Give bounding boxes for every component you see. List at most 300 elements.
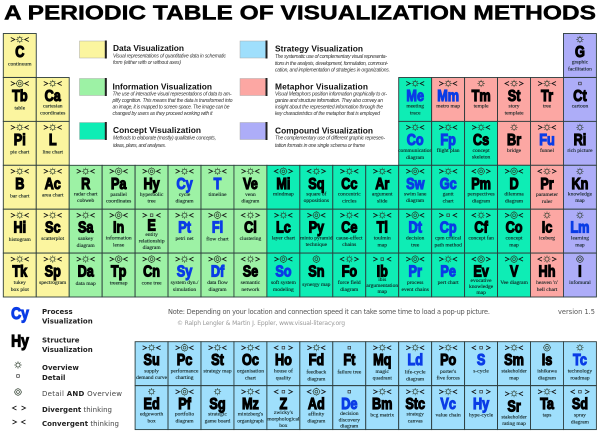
cell: Lm learning map: learning: [571, 236, 589, 242]
cell: Ad affinity diagram: Ad: [308, 396, 325, 414]
cell: Ad affinity diagram: affinity: [308, 411, 325, 418]
cell: Pr parameter ruler: parameter: [536, 192, 558, 198]
cell: De decision discovery diagram: diagram: [340, 424, 359, 430]
cell: Ft failure tree: failure tree: [337, 369, 362, 376]
cell: Fp flight plan: flight plan: [437, 147, 460, 154]
legend: compound visualization: [240, 122, 385, 149]
cell: Se semantic network: Se: [243, 263, 258, 281]
cell: Kn knowledge map: map: [575, 198, 585, 204]
cell: G graphic facilitation: G: [575, 44, 585, 61]
cell: Tr tree: [530, 78, 563, 121]
version: version 1.5: [558, 308, 595, 316]
cell: Ib ibis argumentation map: [366, 253, 399, 297]
cell: Ic iceberg: Ic: [542, 220, 552, 237]
cell: Sn synergy map: [300, 253, 333, 297]
cell: Fd feedback diagram: Fd: [309, 352, 324, 370]
cell: Tr tree: tree: [543, 104, 552, 110]
cell: Cf concept fan: Cf: [474, 220, 488, 237]
cell: Ca cartesian coordinates: Ca: [45, 88, 61, 105]
cell: Ev evocative knowledge map: [465, 253, 498, 297]
cell: St strategy map: [201, 342, 234, 386]
cell: Py minto pyramid technique: technique: [306, 242, 328, 248]
cell: Dt decision tree: tree: [411, 243, 420, 249]
cell: Z zwicky's morphological box: box: [279, 423, 288, 429]
cell: Ed edgeworth box: Ed: [143, 396, 160, 414]
cell: Sm stakeholder map: [498, 342, 530, 386]
cell: Da data map: Da: [78, 263, 94, 281]
cell: Ca cartesian coordinates: coordinates: [40, 110, 65, 116]
cell: Sy system dyn./simulation: system dyn./: [171, 280, 199, 286]
cell: Ac area chart: Ac: [45, 176, 61, 193]
cell: Fu funnel: Fu: [539, 132, 555, 149]
cell: Cn cone tree: cone tree: [142, 281, 162, 287]
cell: Kn knowledge map: knowledge: [568, 191, 593, 197]
cell: In information lense: information: [106, 235, 132, 242]
cell: Hy hyperbolic tree: Hy: [143, 176, 160, 193]
cell: Mz mintzberg's organigraph: Mz: [242, 396, 259, 414]
cell: Sy system dyn./simulation: simulation: [173, 287, 196, 293]
cell: Sq square of oppositions: square of: [306, 190, 327, 197]
cell: D dilemma diagram: [498, 165, 530, 209]
cell: Cc concentric circles: concentric: [338, 191, 361, 197]
key: process visualization: Process: [42, 308, 73, 316]
cell: Me meeting trace: [399, 78, 432, 121]
cell: So soft system modeling: So: [275, 263, 292, 281]
cell: Sr stakeholder rating map: stakeholder: [501, 415, 527, 421]
cell: Ld life-cycle diagram: life-cycle: [405, 369, 426, 376]
cell: Ri rich picture: [563, 121, 596, 165]
cell: Tr tree: Tr: [541, 88, 553, 105]
cell: T timeline: T: [214, 176, 222, 193]
key: detail: Detail: [42, 374, 65, 382]
cell: Po porter's five forces: [432, 342, 465, 386]
cell: Z zwicky's morphological box: Z: [280, 396, 288, 414]
key: overview: [14, 361, 79, 372]
cell: Sa sankey diagram: sankey: [78, 236, 94, 242]
legend: concept visualization: ideas, plans, and analyses.: [113, 143, 166, 149]
cell: Cf concept fan: [465, 209, 498, 253]
cell: Lm learning map: Lm: [570, 220, 589, 237]
cell: Mq magic quadrant: quadrant: [373, 376, 392, 382]
cell: L line chart: line chart: [42, 149, 64, 155]
cell: Ar argument slide: slide: [377, 198, 388, 204]
cell: Pt petri net: Pt: [178, 220, 191, 237]
cell: S s-cycle: [465, 342, 498, 386]
legend: metaphor visualization: key characteristics of the metaphor that is employed: [275, 111, 380, 117]
cell: De decision discovery diagram: [333, 386, 366, 430]
cell: Sw swim lane diagram: swim lane: [404, 191, 427, 197]
cell: Cp cpm critical path method: Cp: [440, 220, 457, 237]
cell: Sp spectrogram: spectrogram: [39, 280, 67, 286]
cell: Ib ibis argumentation map: ibis: [378, 277, 386, 283]
cell: Pm perspectives diagram: diagram: [472, 198, 491, 204]
cell: Tl toulmin map: [366, 209, 399, 253]
cell: Oc organisation chart: [234, 342, 267, 386]
cell: Tl toulmin map: Tl: [377, 220, 388, 237]
cell: Ev evocative knowledge map: knowledge: [469, 284, 494, 290]
cell: Fu funnel: [530, 121, 563, 165]
cell: Ve venn diagram: [234, 165, 267, 209]
cell: Z zwicky's morphological box: morphological: [267, 417, 300, 423]
cell: V Vee diagram: Vee diagram: [500, 280, 529, 286]
cell: Sd spray diagram: spray: [574, 413, 586, 419]
cell: E entity relationship diagram: E: [147, 218, 156, 235]
cell: Br bridge: [498, 121, 530, 165]
cell: B bar chart: [3, 165, 36, 209]
cell: Cp cpm critical path method: [432, 209, 465, 253]
cell: Fo force field diagram: [333, 253, 366, 297]
legend: strategy visualization: [240, 40, 390, 74]
cell: Sm stakeholder map: Sm: [504, 352, 524, 370]
cell: Sc scatterplot: [36, 209, 69, 253]
cell: Pc performance charting: Pc: [177, 352, 192, 370]
cell: Sc scatterplot: scatterplot: [41, 236, 65, 242]
cell: Mz mintzberg's organigraph: organigraph: [237, 419, 264, 425]
key: divergent thinking: Divergent thinking: [42, 406, 112, 414]
periodic table main grid: [3, 34, 596, 297]
cell: Sw swim lane diagram: Sw: [406, 176, 425, 193]
cell: Ce cause-effect chains: Ce: [341, 220, 358, 237]
legend: information visualization: The use of interactive visual representations of data to am-: [112, 92, 232, 98]
cell: Is ishikawa diagram: ishikawa: [537, 369, 557, 375]
cell: Bm bcg matrix: [366, 386, 399, 430]
cell: Pi pie chart: [3, 121, 36, 165]
legend: data visualization: [80, 40, 226, 66]
cell: Py minto pyramid technique: Py: [309, 220, 324, 237]
cell: Pf portfolio diagram: diagram: [176, 419, 194, 425]
key: process visualization: Cy: [11, 305, 29, 323]
legend: strategy visualization: The systematic use of complementary visual representa-: [275, 54, 387, 60]
key: detail and overview: Detail AND Overview: [42, 390, 122, 398]
cell: Sd spray diagram: Sd: [572, 396, 588, 414]
cell: Co communication diagram: communication: [398, 148, 433, 154]
legend: information visualization: changed by users as they proceed working with it: [112, 111, 213, 117]
cell: Co communication diagram: Co: [407, 132, 424, 149]
cell: Tc technology roadmap: Tc: [573, 352, 587, 370]
cell: Kn knowledge map: [563, 165, 596, 209]
key: process visualization: [11, 305, 93, 326]
cell: Ft failure tree: Ft: [343, 352, 356, 370]
key: structure visualization: Structure: [42, 336, 80, 344]
cell: Gc gantt chart: [432, 165, 465, 209]
strategy table: [135, 342, 596, 430]
cell: De decision discovery diagram: De: [341, 396, 358, 414]
legend: concept visualization: Methods to elaborate (mostly) qualitative concepts,: [113, 136, 216, 142]
cell: Pe pert chart: Pe: [440, 263, 456, 281]
cell: St strategy map: strategy map: [203, 369, 232, 375]
cell: Se semantic network: network: [241, 287, 260, 293]
cell: Cc concentric circles: [333, 165, 366, 209]
cell: Mz mintzberg's organigraph: [234, 386, 267, 430]
cell: Su supply demand curve: Su: [143, 352, 160, 370]
cell: Df data flow diagram: data flow: [207, 279, 228, 286]
key: detail: [17, 374, 65, 382]
cell: Sr stakeholder rating map: [498, 386, 530, 430]
cell: Sa sankey diagram: diagram: [77, 243, 95, 249]
cell: Ta taps: Ta: [540, 396, 554, 414]
cell: Cn cone tree: [135, 253, 168, 297]
cell: Cl clustering: clustering: [240, 236, 262, 242]
legend: compound visualization: The complementary use of different graphic represen-: [275, 136, 385, 142]
cell: Sy system dyn./simulation: Sy: [177, 263, 192, 281]
legend: information visualization: plify cognition. This means that the data is transformed into: [112, 98, 233, 104]
cell: Pa parallel coordinates: [102, 165, 135, 209]
cell: Stc strategy canvas: [399, 386, 432, 430]
cell: Pr process event chains: process: [407, 280, 423, 286]
cell: Cs concept skeleton: Cs: [473, 132, 489, 149]
cell: Kn knowledge map: Kn: [571, 176, 588, 193]
cell: Ce cause-effect chains: [333, 209, 366, 253]
cell: Hy hype-cycle: [465, 386, 498, 430]
cell: Ca cartesian coordinates: [36, 78, 69, 121]
cell: Pi pie chart: Pi: [14, 132, 26, 149]
cell: Hi histogram: histogram: [9, 237, 32, 243]
cell: Pa parallel coordinates: coordinates: [106, 198, 131, 204]
cell: Mm metro map: metro map: [436, 104, 460, 110]
cell: D dilemma diagram: diagram: [505, 198, 524, 204]
cell: Cs concept skeleton: [465, 121, 498, 165]
cell: Ta taps: taps: [543, 413, 551, 419]
cell: Hy hyperbolic tree: [135, 165, 168, 209]
cell: Mi mindmap: [267, 165, 300, 209]
cell: Ld life-cycle diagram: Ld: [407, 352, 423, 370]
cell: Sd spray diagram: [563, 386, 596, 430]
cell: Cl clustering: Cl: [244, 220, 257, 237]
legend: strategy visualization: Strategy Visualization: [275, 44, 363, 54]
legend: metaphor visualization: Metaphor Visualization: [275, 82, 368, 92]
cell: C continuum: continuum: [8, 62, 32, 68]
cell: Sq square of oppositions: Sq: [308, 176, 324, 193]
cell: Po porter's five forces: five forces: [436, 375, 460, 382]
cell: Co concept map: concept: [505, 236, 523, 242]
cell: Ad affinity diagram: diagram: [307, 419, 326, 425]
cell: Ld life-cycle diagram: [399, 342, 432, 386]
cell: Sn synergy map: Sn: [308, 263, 324, 281]
key: structure visualization: [11, 332, 93, 354]
cell: G graphic facilitation: graphic: [572, 60, 589, 66]
cell: Ve venn diagram: venn: [245, 192, 256, 198]
cell: Ib ibis argumentation map: Ib: [377, 263, 388, 281]
cell: Pe pert chart: [432, 253, 465, 297]
cell: So soft system modeling: [267, 253, 300, 297]
cell: Mz mintzberg's organigraph: mintzberg's: [238, 412, 263, 418]
legend: information visualization: Information Visualization: [112, 82, 212, 92]
cell: B bar chart: B: [15, 176, 24, 193]
cell: Co communication diagram: diagram: [406, 155, 425, 161]
cell: Cs concept skeleton: skeleton: [472, 154, 491, 160]
cell: Tm temple: Tm: [472, 88, 491, 105]
cell: Df data flow diagram: Df: [211, 263, 224, 281]
cell: Sw swim lane diagram: [399, 165, 432, 209]
cell: St story template: template: [505, 110, 524, 116]
cell: Cn cone tree: Cn: [143, 263, 160, 281]
key: convergent thinking: Convergent thinking: [42, 420, 119, 428]
cell: Cs concept skeleton: concept: [473, 148, 490, 154]
cell: Lc layer chart: layer chart: [272, 236, 296, 242]
cell: Pi pie chart: pie chart: [10, 149, 30, 155]
cell: Pr process event chains: Pr: [409, 263, 422, 281]
cell: Se semantic network: [234, 253, 267, 297]
cell: Stc strategy canvas: canvas: [408, 419, 423, 425]
cell: T timeline: [201, 165, 234, 209]
cell: De decision discovery diagram: decision: [340, 411, 359, 417]
cell: Sm stakeholder map: stakeholder: [501, 369, 527, 375]
legend: strategy visualization: tions in the analysis, development, formulation, communi-: [275, 61, 388, 67]
cell: Ar argument slide: argument: [372, 191, 393, 197]
cell: Sq square of oppositions: oppositions: [304, 198, 329, 204]
legend: metaphor visualization: ganize and structure information. They also convey an: [275, 98, 383, 104]
cell: Co concept map: Co: [506, 220, 523, 237]
cell: Sp spectrogram: [36, 253, 69, 297]
cell: Pa parallel coordinates: parallel: [110, 192, 127, 198]
cell: Sg strategic game board: Sg: [209, 396, 226, 414]
cell: Mq magic quadrant: Mq: [373, 352, 391, 370]
cell: Tb table: Tb: [12, 88, 28, 105]
cell: Ib ibis argumentation map: argumentation: [366, 283, 398, 289]
cell: Ce cause-effect chains: chains: [342, 242, 356, 248]
cell: Ac area chart: [36, 165, 69, 209]
cell: Oc organisation chart: Oc: [242, 352, 259, 370]
cell: Lc layer chart: [267, 209, 300, 253]
cell: Fo force field diagram: force field: [338, 279, 361, 286]
cell: Cc concentric circles: circles: [342, 198, 356, 204]
cell: Tk tukey box plot: [3, 253, 36, 297]
cell: Sr stakeholder rating map: Sr: [507, 399, 521, 416]
cell: I infomural: [563, 253, 596, 297]
cell: Tc technology roadmap: [563, 342, 596, 386]
cell: Sa sankey diagram: [69, 209, 102, 253]
cell: Lc layer chart: Lc: [276, 220, 291, 237]
cell: Ld life-cycle diagram: diagram: [406, 377, 425, 383]
legend: data visualization: Data Visualization: [113, 43, 184, 53]
cell: Tp treemap: [102, 253, 135, 297]
cell: Cc concentric circles: Cc: [341, 176, 358, 193]
cell: Mi mindmap: mindmap: [273, 191, 294, 197]
cell: Sy system dyn./simulation: [168, 253, 201, 297]
cell: Ho house of quality: [267, 342, 300, 386]
title: A PERIODIC TABLE OF VISUALIZATION METHODS: [4, 2, 596, 24]
legend: strategy visualization: cation, and implementation of strategies in organizations.: [275, 68, 390, 74]
cell: Su supply demand curve: [135, 342, 168, 386]
cell: Sc scatterplot: Sc: [45, 220, 61, 237]
cell: Tm temple: [465, 78, 498, 121]
cell: Mm metro map: [432, 78, 465, 121]
cell: Ed edgeworth box: [135, 386, 168, 430]
cell: Oc organisation chart: chart: [245, 376, 256, 382]
cell: Su supply demand curve: supply: [144, 369, 159, 375]
cell: Fu funnel: funnel: [540, 147, 554, 154]
cell: Hy hyperbolic tree: hyperbolic: [140, 192, 164, 198]
cell: Sa sankey diagram: Sa: [78, 220, 94, 237]
cell: Tp treemap: treemap: [110, 281, 128, 287]
cell: Dt decision tree: Dt: [409, 220, 422, 237]
cell: Ri rich picture: rich picture: [567, 148, 593, 154]
cell: Fl flow chart: flow chart: [206, 236, 229, 243]
legend: compound visualization: tation formats in one single schema or frame: [275, 143, 365, 149]
cell: Gc gantt chart: Gc: [440, 176, 457, 193]
cell: R radar chart cobweb: R: [81, 176, 90, 193]
cell: Ct cartoon: cartoon: [572, 104, 588, 110]
cell: Ac area chart: area chart: [42, 192, 64, 198]
cell: So soft system modeling: modeling: [273, 287, 294, 293]
cell: Po porter's five forces: Po: [440, 352, 457, 370]
cell: Ft failure tree: [333, 342, 366, 386]
cell: I infomural: infomural: [569, 279, 591, 286]
cell: L line chart: [36, 121, 69, 165]
cell: Hy hype-cycle: Hy: [473, 396, 489, 414]
cell: Pe pert chart: pert chart: [438, 280, 459, 286]
cell: Ev evocative knowledge map: map: [476, 290, 486, 296]
cell: In information lense: In: [113, 220, 124, 237]
cell: Po porter's five forces: porter's: [440, 369, 456, 375]
cell: Pm perspectives diagram: perspectives: [468, 191, 495, 197]
cell: Tl toulmin map: map: [378, 243, 387, 249]
cell: Py minto pyramid technique: [300, 209, 333, 253]
cell: So soft system modeling: soft system: [271, 279, 297, 286]
cell: Me meeting trace: meeting: [406, 104, 424, 110]
cell: Hi histogram: [3, 209, 36, 253]
cell: Cp cpm critical path method: path method: [434, 243, 462, 249]
key: structure visualization: Visualization: [42, 346, 93, 354]
cell: Pa parallel coordinates: Pa: [111, 176, 127, 193]
cell: Gc gantt chart: gantt: [443, 191, 454, 197]
key: detail and overview: [14, 388, 122, 398]
cell: Ar argument slide: [366, 165, 399, 209]
cell: Cf concept fan: concept fan: [468, 235, 494, 242]
cell: Hh heaven n hell chart: heaven 'n': [536, 280, 558, 286]
cell: St story template: St: [508, 88, 521, 105]
credit: © Ralph Lengler & Martin J. Eppler, www.visual-literacy.org: [177, 320, 345, 327]
cell: Bm bcg matrix: bcg matrix: [370, 413, 394, 419]
cell: De decision discovery diagram: discovery: [339, 418, 360, 424]
cell: Ic iceberg: iceberg: [539, 236, 555, 242]
cell: Pf portfolio diagram: portfolio: [175, 411, 194, 418]
cell: Pt petri net: petri net: [175, 236, 194, 242]
cell: C continuum: [3, 34, 36, 77]
cell: G graphic facilitation: [563, 34, 596, 77]
cell: Tc technology roadmap: roadmap: [570, 376, 590, 382]
cell: Z zwicky's morphological box: [267, 386, 300, 430]
cell: Bm bcg matrix: Bm: [372, 396, 392, 414]
cell: Pt petri net: [168, 209, 201, 253]
cell: Dt decision tree: decision: [406, 236, 425, 242]
cell: Me meeting trace: trace: [410, 110, 421, 116]
cell: E entity relationship diagram: diagram: [143, 245, 161, 251]
cell: Tl toulmin map: toulmin: [374, 236, 391, 242]
cell: Pr parameter ruler: Pr: [540, 176, 554, 193]
cell: St strategy map: St: [211, 352, 224, 370]
legend: metaphor visualization: insight about the represented information through the: [275, 104, 383, 110]
cell: Me meeting trace: Me: [406, 88, 424, 105]
cell: Cp cpm critical path method: cpm critical: [435, 236, 462, 242]
cell: Pf portfolio diagram: Pf: [178, 396, 191, 414]
note: Note: Depending on your location and connection speed it can take some time to load a pop-up picture.: [168, 308, 490, 316]
cell: Fd feedback diagram: [300, 342, 333, 386]
cell: Cy cycle diagram: diagram: [176, 198, 194, 204]
cell: Fd feedback diagram: diagram: [307, 377, 326, 383]
cell: Sg strategic game board: strategic: [208, 412, 227, 418]
cell: Mq magic quadrant: magic: [376, 369, 390, 375]
cell: D dilemma diagram: D: [509, 176, 519, 193]
cell: D dilemma diagram: dilemma: [504, 191, 524, 197]
cell: Lm learning map: [563, 209, 596, 253]
cell: Pm perspectives diagram: Pm: [471, 176, 491, 193]
cell: Co communication diagram: [398, 121, 433, 165]
cell: Vc value chain: [432, 386, 465, 430]
cell: Pr parameter ruler: ruler: [542, 199, 552, 205]
cell: Py minto pyramid technique: minto pyramid: [300, 236, 333, 242]
cell: Pc performance charting: [168, 342, 201, 386]
